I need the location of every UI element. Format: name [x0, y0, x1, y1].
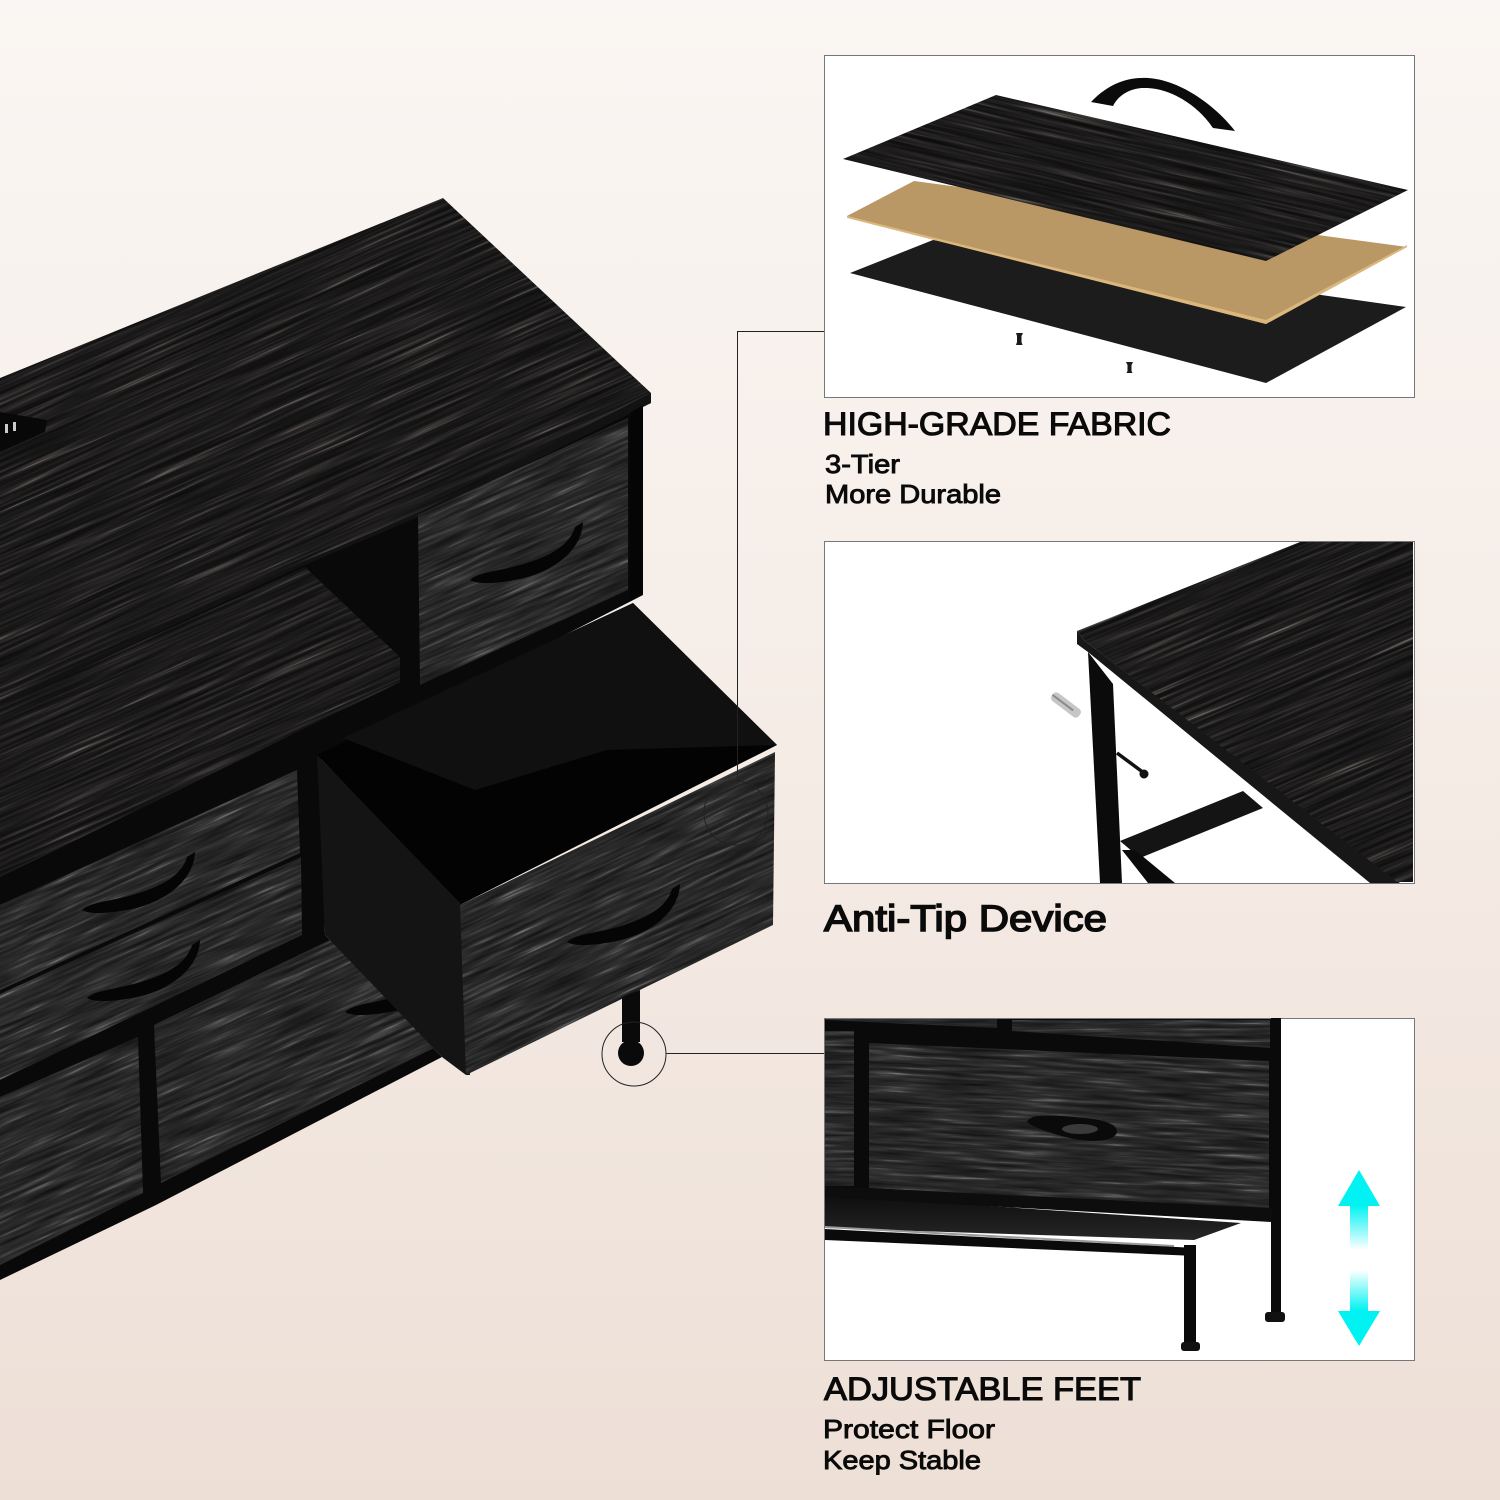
heading: adjustable feet: ADJUSTABLE FEET: [824, 1371, 1141, 1407]
dresser top front edge: [0, 393, 651, 705]
open drawer front: [460, 752, 775, 1075]
icon: arched handle: [1091, 78, 1235, 131]
dresser product image: [0, 198, 777, 1280]
drawer handle: [1027, 1115, 1117, 1141]
dresser frame and shadow body: [0, 405, 643, 1280]
open shelf: [0, 567, 400, 877]
adjustable leg: [618, 990, 644, 1066]
bottom left drawer: [0, 1037, 143, 1265]
icon: wall anchor: [1049, 691, 1083, 719]
heading: high-grade fabric: HIGH-GRADE FABRIC: [823, 406, 1171, 442]
lower rail: [825, 1229, 1196, 1256]
layer: carbon base: [850, 240, 1406, 383]
bottom centre drawer: [154, 940, 434, 1183]
under shelf: [825, 1195, 1241, 1240]
front foot: [1181, 1245, 1200, 1351]
top drawers strip right: [1012, 1020, 1270, 1048]
upper right drawer handle: [470, 522, 583, 583]
layer: MDF core: [847, 181, 1407, 324]
callout: connector to fabric panel: [704, 332, 824, 845]
tabletop edge: [1077, 631, 1400, 883]
open drawer side: [317, 755, 470, 1075]
upper right drawer: [418, 418, 628, 685]
icon: anti-tip screw: [1117, 753, 1148, 778]
panel: high-grade fabric: [824, 55, 1415, 398]
left drawer: [825, 1031, 854, 1186]
text block: feet benefits: [823, 1414, 995, 1475]
left middle drawer lower: [0, 857, 302, 1080]
frame legs and braces: [1088, 652, 1263, 883]
panel: anti-tip device: [824, 541, 1415, 884]
icon: screw two: [1126, 362, 1133, 373]
text block: fabric benefits: [825, 449, 1001, 509]
left middle drawer upper: [0, 770, 300, 990]
frame post: [630, 405, 643, 600]
left middle drawer upper handle: [82, 852, 195, 913]
text block: feet benefits: Keep Stable: [823, 1445, 981, 1475]
main drawer: [869, 1043, 1269, 1208]
bottom centre drawer handle: [345, 954, 458, 1015]
arrow: up: [1338, 1170, 1380, 1250]
text block: fabric benefits: More Durable: [825, 479, 1001, 509]
left middle drawer lower handle: [87, 940, 200, 1001]
heading: anti-tip device: Anti-Tip Device: [824, 898, 1107, 939]
USB charging port: [0, 412, 47, 452]
open drawer handle: [567, 884, 680, 945]
lower frame rail: [825, 1186, 1272, 1222]
top drawers strip left: [826, 1019, 997, 1028]
layer: wood veneer: [843, 95, 1408, 261]
text block: feet benefits: Protect Floor: [823, 1414, 995, 1444]
panel: adjustable feet: [820, 1000, 1414, 1360]
arrow: down: [1338, 1270, 1380, 1346]
lower rail highlight: [825, 1226, 1174, 1247]
frame backing: [825, 1019, 1271, 1215]
tabletop: [1077, 542, 1413, 882]
callout: connector to feet panel: [602, 1022, 824, 1086]
open drawer interior: [317, 603, 777, 905]
text block: fabric benefits: 3-Tier: [825, 449, 900, 479]
right frame post with foot: [1265, 1018, 1285, 1322]
icon: screw one: [1016, 333, 1023, 345]
dresser top surface: [0, 198, 651, 701]
